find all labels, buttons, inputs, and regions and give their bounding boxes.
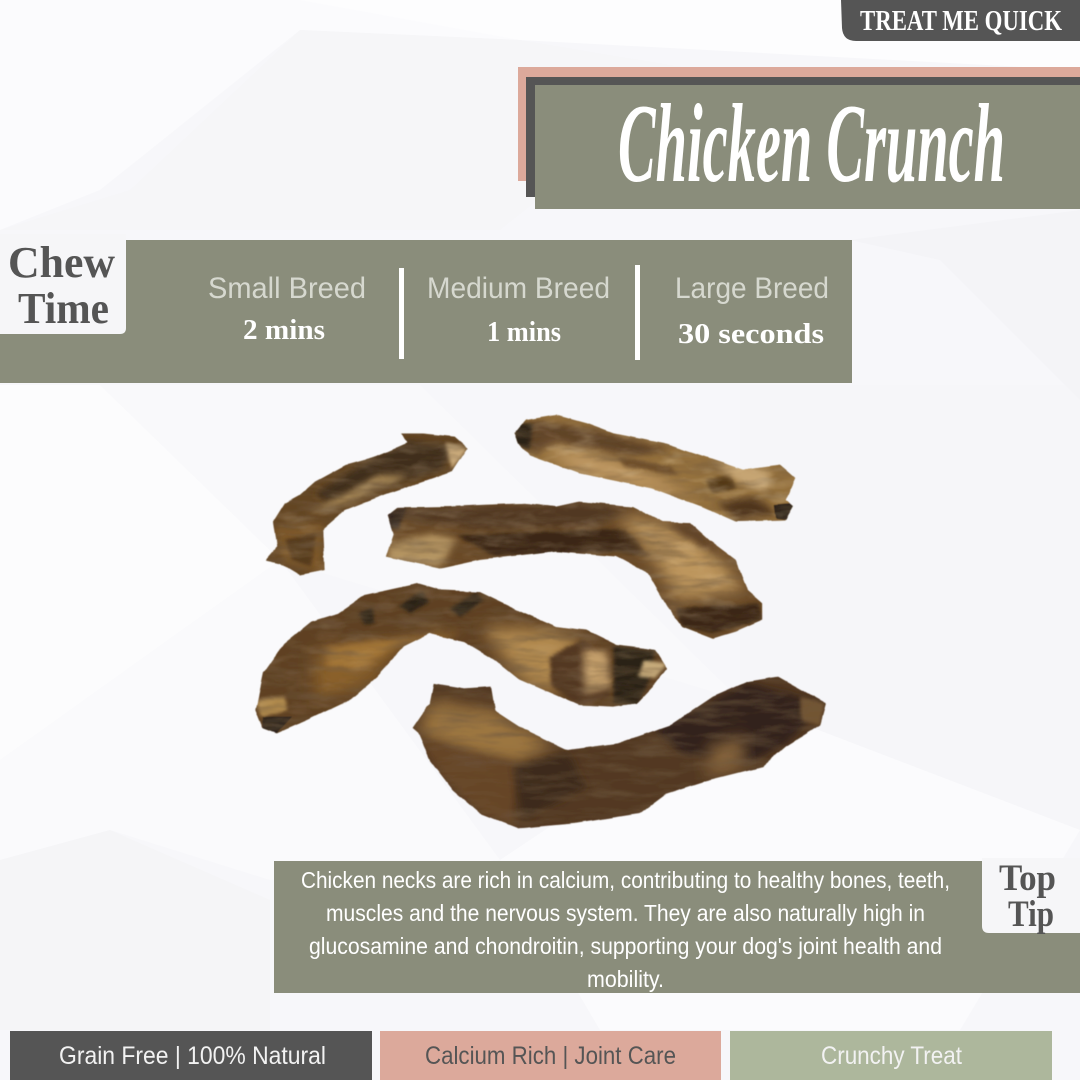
product photo: dried chicken necks [254,414,826,830]
chew time label: Time [18,284,109,333]
chew time label [0,234,126,334]
chew time label: Chew [8,238,115,287]
feature bar: calcium [380,1031,721,1080]
feature bar: grain free [10,1031,372,1080]
medium breed: Medium Breed [427,272,610,305]
medium breed [427,272,610,348]
neck top right [514,414,796,522]
tip text: glucosamine and chondroitin, supporting your dog's joint health and [309,933,942,959]
small breed: Small Breed [208,272,366,305]
neck top left [265,432,468,576]
title banner [518,67,1080,209]
small breed [208,272,366,346]
feature bar: grain free: Grain Free | 100% Natural [59,1042,326,1070]
top tip label: Tip [1008,894,1054,935]
feature bar: crunchy: Crunchy Treat [821,1042,962,1070]
top tip label [982,858,1080,935]
top tip label: Top [999,858,1056,899]
top tip panel [274,858,1080,993]
tip text: mobility. [587,966,664,992]
tip text: Chicken necks are rich in calcium, contributing to healthy bones, teeth, [301,867,950,893]
feature bar: calcium: Calcium Rich | Joint Care [425,1042,676,1070]
large breed: 30 seconds [678,318,824,350]
large breed: Large Breed [675,272,829,305]
neck middle [380,497,767,643]
neck lower left [250,577,675,740]
tip text: muscles and the nervous system. They are also naturally high in [326,900,925,926]
medium breed: 1 mins [487,317,561,348]
brand tab [841,0,1080,41]
large breed [675,272,829,350]
neck bottom [411,673,832,833]
small breed: 2 mins [243,315,325,346]
tip text [301,867,950,992]
feature bar: crunchy [730,1031,1052,1080]
chew time panel [0,234,852,383]
